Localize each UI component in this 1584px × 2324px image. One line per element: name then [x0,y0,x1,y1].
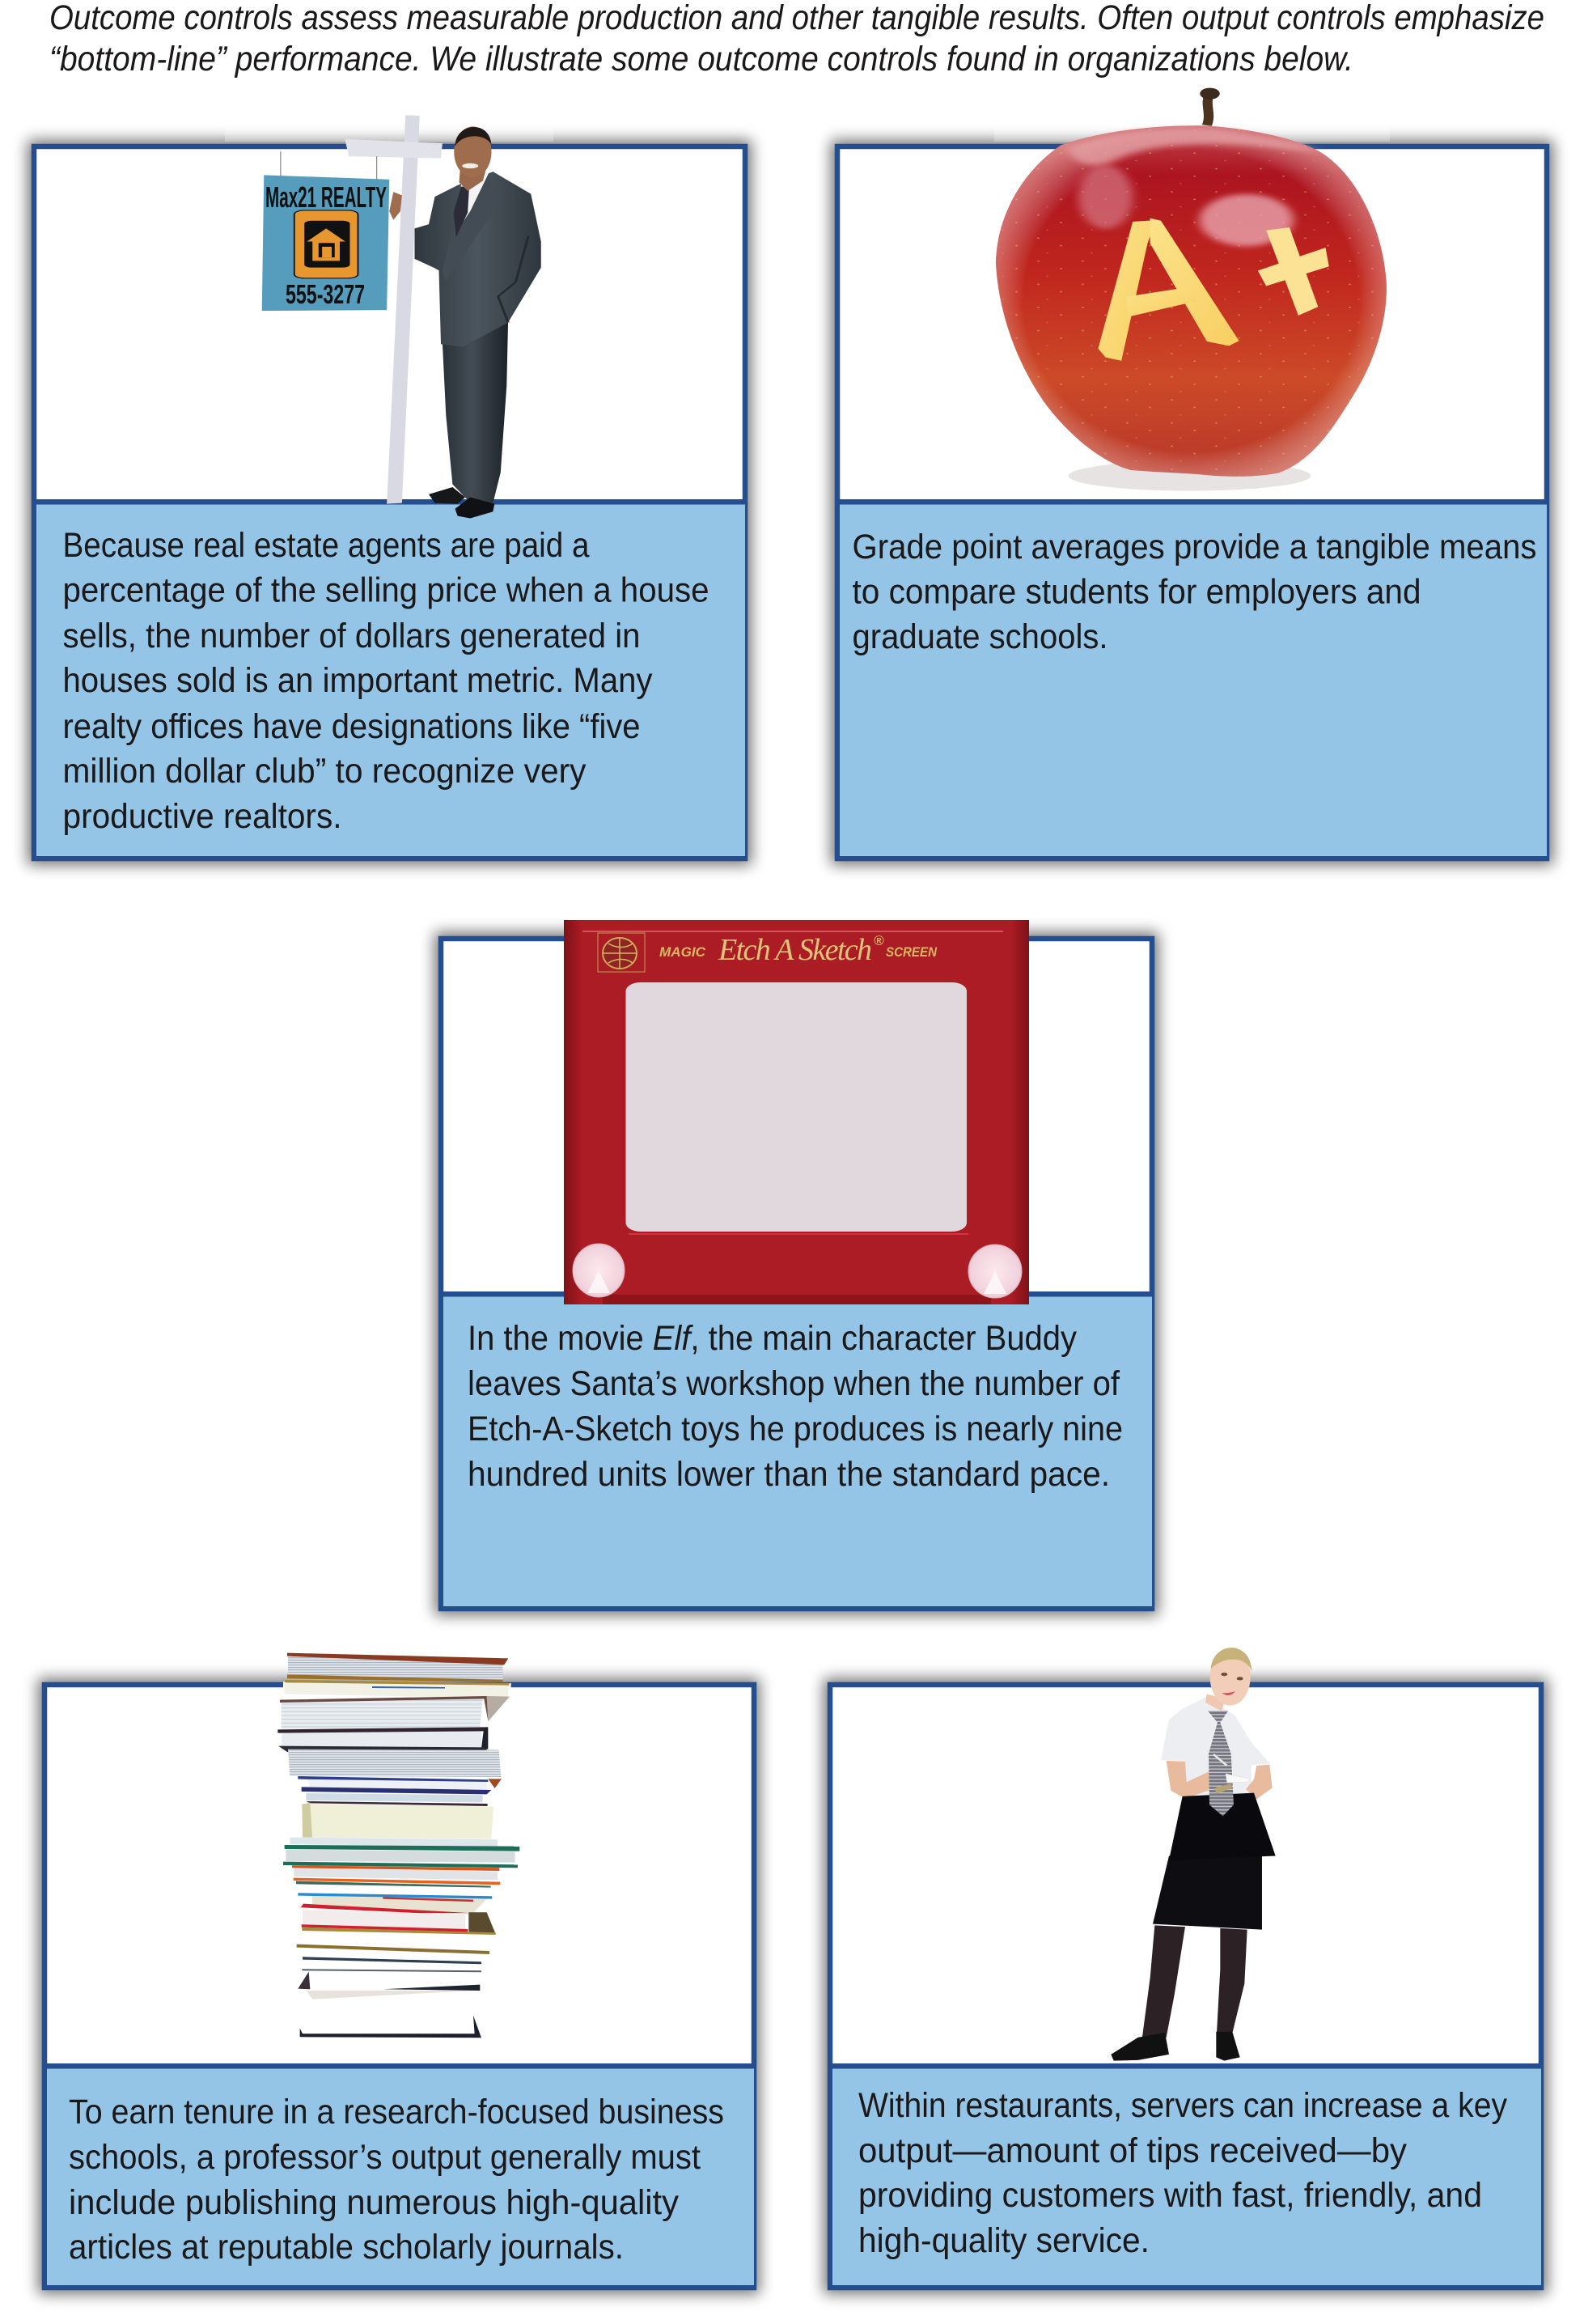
apple highlights [1066,128,1318,246]
book 6 [298,1776,502,1790]
text: real estate: percentage of the selling price when a house [63,571,709,610]
text: real estate: sells, the number of dollars generated in [63,617,641,655]
man: shirt and tie [458,172,489,230]
sign text: company: Max21 REALTY [265,180,387,214]
text: grade point [853,528,1537,656]
book 12 [301,1904,496,1935]
plus sign [1258,227,1329,316]
text: real estate: realty offices have designations like “five [63,708,641,746]
text: real estate: million dollar club” to recognize very [63,753,587,791]
book 11 [298,1893,492,1913]
illustration: Etch A Sketch toy: Etch A Sketch [718,933,874,967]
panel: Elf Etch-A-Sketch [434,920,1158,1615]
waitress legs [1142,1925,1247,2039]
book 8 [302,1801,493,1839]
text: servers: Within restaurants, servers can increase a key [858,2087,1508,2125]
illustration: stack of books [277,1653,519,2038]
text: tenure: include publishing numerous high-quality [69,2184,680,2222]
panel: restaurant servers [824,1648,1548,2294]
book 14 [298,1972,480,2000]
waitress neck [1205,1694,1226,1711]
book 3 [280,1696,510,1729]
text: tenure: articles at reputable scholarly journals. [69,2229,624,2267]
man: legs [443,320,508,503]
toy frame [564,920,1029,1304]
toy brand text: MAGIC [659,944,706,960]
illustration: realtor with sign [262,115,541,519]
text: real estate: Because real estate agents are paid a [63,527,590,565]
book 15 [300,2016,481,2038]
waitress tie [1208,1711,1234,1816]
letter A [1098,218,1239,361]
illustration: Etch A Sketch toy [564,920,1029,1304]
toy logo [598,933,645,972]
text: grade point: graduate schools. [853,618,1108,656]
book 1 [287,1653,508,1682]
apple shadow [1069,460,1311,491]
text: servers: high-quality service. [858,2222,1150,2260]
illustration: Etch A Sketch toy: SCREEN [886,944,938,960]
illustration: apple with A+ [996,88,1387,491]
text: real estate [63,527,709,836]
text: servers [858,2087,1508,2260]
text: Elf: In the movie Elf, the main character Buddy [468,1320,1078,1358]
toy screen [626,982,967,1232]
man: head [460,168,486,191]
book 10 [292,1865,500,1888]
text: servers: providing customers with fast, friendly, and [858,2177,1482,2215]
man: jacket [414,172,541,347]
book 9 [283,1838,519,1868]
text: Elf: hundred units lower than the standard pace. [468,1456,1110,1494]
panel: professor tenure [38,1653,760,2294]
waitress shirt [1161,1697,1270,1796]
book 7 [302,1787,491,1802]
text: tenure: To earn tenure in a research-focused business [69,2093,724,2131]
waitress head [1210,1648,1252,1706]
man: hand [389,192,402,220]
apple stem [1207,95,1209,125]
intro text: “bottom-line” performance. We illustrate some outcome controls found in organizations below. [49,40,1353,78]
waitress arms [1167,1761,1273,1799]
book 5 [278,1746,501,1777]
text: tenure [69,2093,724,2267]
house icon [307,228,345,261]
apple body [996,125,1387,477]
panel: grade point averages [831,88,1553,865]
book 4 [277,1727,488,1749]
text: real estate: houses sold is an important metric. Many [63,662,653,700]
text: tenure: schools, a professor’s output generally must [69,2139,701,2177]
panel: real estate agents [28,115,752,865]
book 13 [297,1944,489,1972]
sign text: phone: 555-3277 [286,279,365,309]
waitress notepad [1213,1754,1252,1794]
text: real estate: productive realtors. [63,798,341,836]
waitress skirt [1153,1855,1262,1930]
waitress apron [1169,1793,1276,1860]
sign post [387,115,420,504]
text: grade point: to compare students for employers and [853,573,1421,612]
text: Elf [468,1320,1123,1494]
text: Elf: leaves Santa’s workshop when the number of [468,1365,1120,1403]
hanging sign [262,175,389,311]
text: Elf: Etch-A-Sketch toys he produces is nearly nine [468,1410,1123,1448]
text: grade point: Grade point averages provide a tangible means [853,528,1537,566]
waitress shoes [1111,2032,1240,2061]
illustration: waitress [1111,1648,1276,2061]
text: servers: output—amount of tips received—by [858,2132,1408,2170]
left knob [573,1244,625,1297]
illustration: Etch A Sketch toy: ® [874,933,884,948]
intro text [49,0,1544,78]
right knob [968,1245,1022,1298]
book 2 [285,1680,510,1698]
